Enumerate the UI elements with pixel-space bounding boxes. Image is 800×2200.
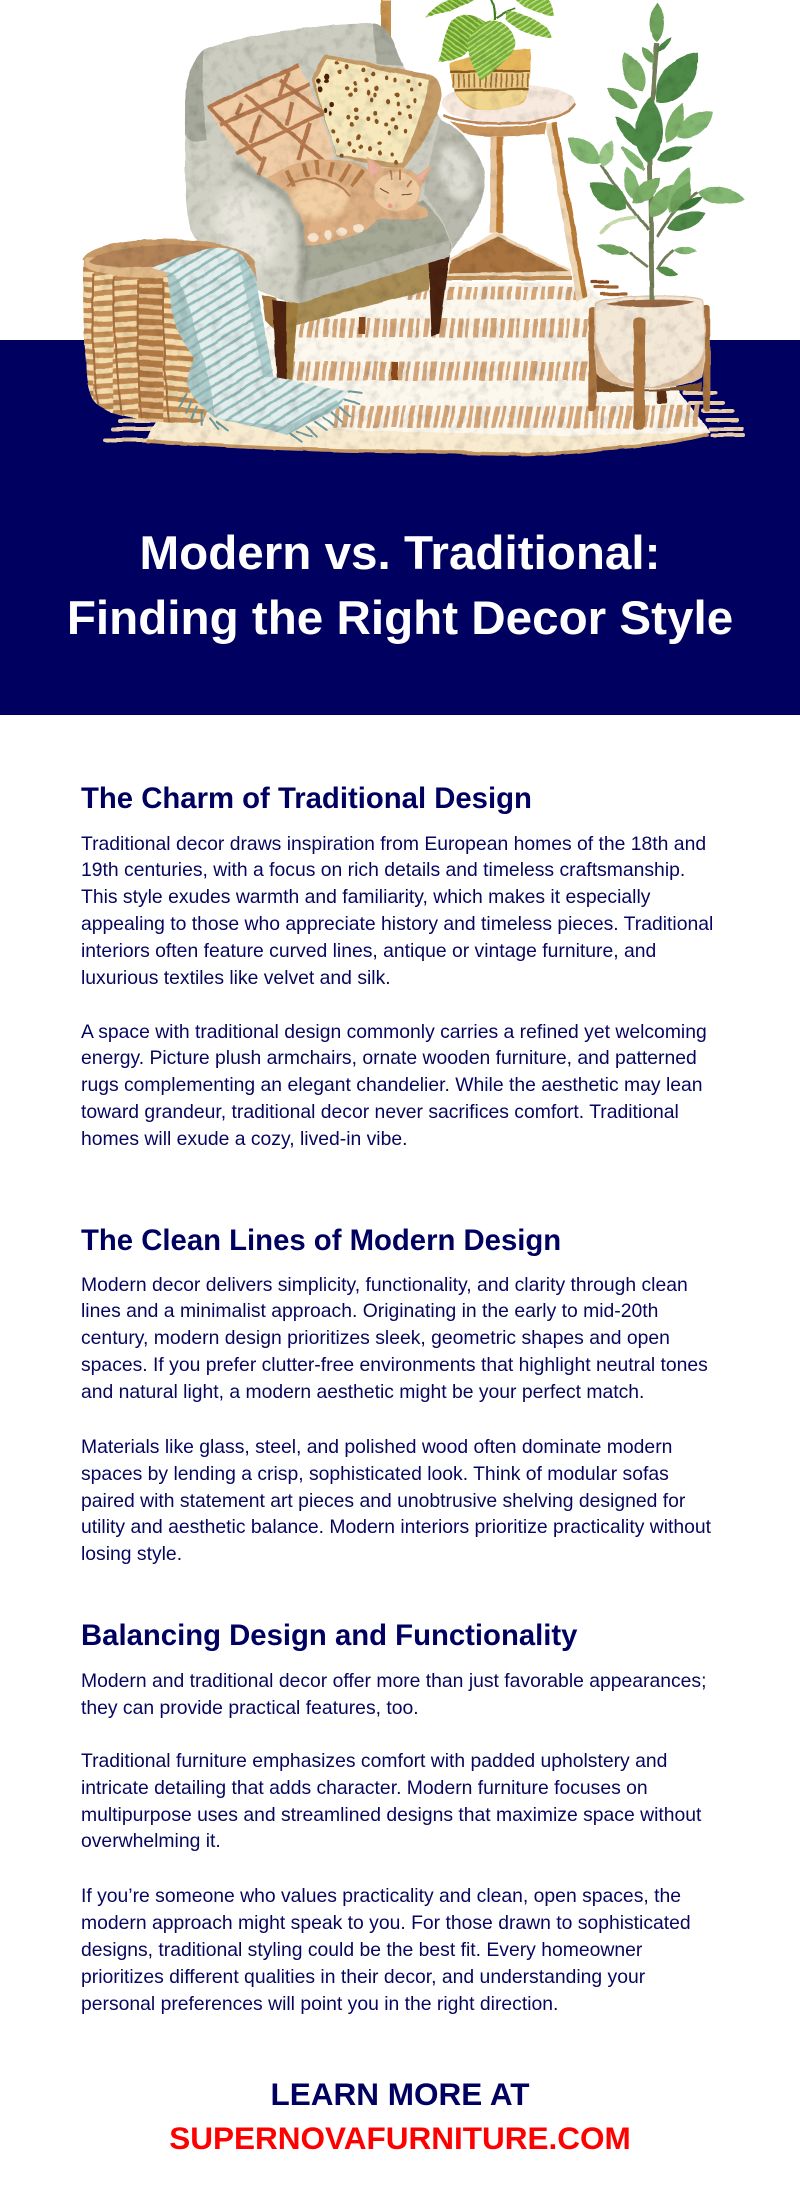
- striped blanket: [152, 247, 362, 442]
- title: [67, 526, 733, 645]
- paragraph: modern materials: paired with statement art pieces and unobtrusive shelving designed for: [81, 1490, 685, 1512]
- paragraph: personal preferences: designs, traditional styling could be the best fit. Every homeowner: [81, 1939, 642, 1961]
- paragraph: modern materials: [81, 1436, 711, 1565]
- armchair: [185, 23, 485, 380]
- paragraph: traditional atmosphere: A space with traditional design commonly carries a refined yet welcoming: [81, 1021, 707, 1043]
- paragraph: practical features: Modern and traditional decor offer more than just favorable appearances;: [81, 1670, 706, 1692]
- dotted pillow: [312, 55, 442, 168]
- paragraph: traditional inspiration: 19th centuries, with a focus on rich details and timeless craftsmanship.: [81, 859, 685, 881]
- paragraph: modern simplicity: lines and a minimalist approach. Originating in the early to mid-20th: [81, 1300, 658, 1322]
- heading: Balancing Design and Functionality: Balancing Design and Functionality: [81, 1619, 577, 1652]
- paragraph: furniture comparison: intricate detailing that adds character. Modern furniture focuses on: [81, 1777, 648, 1799]
- paragraph: modern simplicity: [81, 1274, 708, 1403]
- rug: [105, 282, 743, 454]
- paragraph: traditional atmosphere: toward grandeur, traditional decor never sacrifices comfort. Traditional: [81, 1101, 679, 1123]
- paragraph: furniture comparison: Traditional furniture emphasizes comfort with padded upholstery and: [81, 1750, 667, 1772]
- paragraph: modern materials: spaces by lending a crisp, sophisticated look. Think of modular sofas: [81, 1463, 669, 1485]
- wooden pole behind armchair: [381, 0, 391, 36]
- paragraph: traditional inspiration: interiors often feature curved lines, antique or vintage furniture, and: [81, 940, 656, 962]
- woven basket: [80, 240, 257, 423]
- paragraph: traditional atmosphere: homes will exude a cozy, lived-in vibe.: [81, 1128, 407, 1150]
- paragraph: traditional inspiration: appealing to those who appreciate history and timeless pieces. Traditional: [81, 913, 713, 935]
- call to action: SUPERNOVAFURNITURE.COM: [169, 2120, 631, 2156]
- paragraph: personal preferences: modern approach might speak to you. For those drawn to sophisticated: [81, 1912, 691, 1934]
- paragraph: personal preferences: personal preferences will point you in the right direction.: [81, 1993, 558, 2015]
- sleeping cat: [267, 157, 432, 245]
- call to action: LEARN MORE AT: [270, 2076, 529, 2112]
- paragraph: modern simplicity: Modern decor delivers simplicity, functionality, and clarity through clean: [81, 1274, 688, 1296]
- plant pot on wooden stand: [588, 296, 710, 430]
- paragraph: practical features: [81, 1670, 706, 1719]
- paragraph: traditional inspiration: luxurious textiles like velvet and silk.: [81, 967, 391, 989]
- geometric pillow: [207, 65, 335, 178]
- paragraph: traditional atmosphere: energy. Picture plush armchairs, ornate wooden furniture, and patterned: [81, 1047, 697, 1069]
- paragraph: personal preferences: If you’re someone who values practicality and clean, open spaces, the: [81, 1885, 681, 1907]
- paragraph: practical features: they can provide practical features, too.: [81, 1697, 419, 1719]
- section: The Clean Lines of Modern Design: [81, 1224, 711, 1565]
- paragraph: traditional inspiration: [81, 833, 713, 989]
- paragraph: traditional inspiration: Traditional decor draws inspiration from European homes of the 18th and: [81, 833, 706, 855]
- paragraph: personal preferences: prioritizes different qualities in their decor, and understanding your: [81, 1966, 645, 1988]
- paragraph: furniture comparison: overwhelming it.: [81, 1830, 221, 1852]
- title: Modern vs. Traditional:: [140, 526, 660, 580]
- navy header band: [0, 340, 800, 715]
- paragraph: traditional atmosphere: rugs complementing an elegant chandelier. While the aesthetic may lean: [81, 1074, 703, 1096]
- heading: The Clean Lines of Modern Design: The Clean Lines of Modern Design: [81, 1224, 561, 1257]
- section: Balancing Design and Functionality: [81, 1619, 706, 2015]
- tall green plant: [561, 2, 747, 300]
- side table: [442, 83, 587, 302]
- paragraph: modern materials: Materials like glass, steel, and polished wood often dominate modern: [81, 1436, 672, 1458]
- paragraph: furniture comparison: [81, 1750, 702, 1852]
- paragraph: modern simplicity: and natural light, a modern aesthetic might be your perfect match.: [81, 1381, 644, 1403]
- section: The Charm of Traditional Design: [81, 782, 713, 1150]
- paragraph: modern simplicity: century, modern design prioritizes sleek, geometric shapes and open: [81, 1327, 670, 1349]
- paragraph: modern simplicity: spaces. If you prefer clutter-free environments that highlight neutral tones: [81, 1354, 708, 1376]
- paragraph: traditional atmosphere: [81, 1021, 707, 1150]
- illustration: armchair, side table, plants, basket and rug: [82, 0, 745, 456]
- call to action: [169, 2076, 631, 2156]
- heading: The Charm of Traditional Design: The Charm of Traditional Design: [81, 782, 532, 815]
- paragraph: modern materials: losing style.: [81, 1543, 182, 1565]
- paragraph: traditional inspiration: This style exudes warmth and familiarity, which makes it especially: [81, 886, 650, 908]
- potted plant on table: [425, 0, 554, 111]
- title: Finding the Right Decor Style: [67, 592, 733, 645]
- paragraph: personal preferences: [81, 1885, 691, 2015]
- paragraph: modern materials: utility and aesthetic balance. Modern interiors prioritize practicality without: [81, 1516, 711, 1538]
- paragraph: furniture comparison: multipurpose uses and streamlined designs that maximize space without: [81, 1804, 701, 1826]
